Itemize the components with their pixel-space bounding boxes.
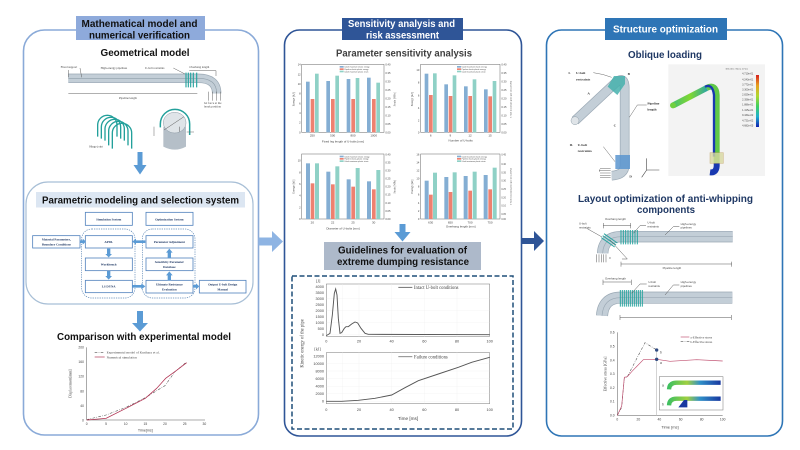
- diagram: oblique pipeline with restraints: f: [599, 169, 601, 173]
- bar chart: number of U-bolts: 0.30: [501, 80, 507, 84]
- diagram: oblique pipeline with restraints: restraints: [576, 77, 591, 81]
- line chart: effective stress vs time: [603, 330, 726, 430]
- arrow: down to comparison: [132, 311, 148, 332]
- flowchart: Material Parameters,: [42, 238, 71, 242]
- arrow: down to parametric system: [134, 152, 146, 174]
- diagram: layout B with horizontal restraints: U-bolt: [648, 280, 656, 284]
- bar chart: overhang length: 0.45: [501, 154, 507, 156]
- line chart: effective stress vs time: 0.6: [610, 330, 615, 334]
- bar chart: number of U-bolts: 0.00: [501, 130, 507, 134]
- line chart: effective stress vs time: 20: [636, 418, 640, 422]
- bar chart: overhang length: 0.35: [501, 172, 507, 174]
- line chart: effective stress vs time: a-Effective stress: [690, 335, 713, 339]
- diagram: layout B with horizontal restraints: [602, 276, 732, 320]
- diagram: layout B with horizontal restraints: pipelines: [681, 284, 692, 288]
- line chart: intact U-bolt conditions: 0: [325, 339, 327, 343]
- bar chart: diameter of U-bolts: 0.20: [385, 185, 391, 189]
- panel title: Structure optimization: [613, 24, 718, 36]
- line chart: effective stress vs time: 0.0: [610, 414, 615, 418]
- bar chart: diameter of U-bolts: 22: [331, 220, 335, 224]
- diagram: geometrical model: U-bolt restraints: [145, 66, 165, 70]
- line chart: intact U-bolt conditions: 20: [357, 339, 361, 343]
- bar chart: fixed leg length: U-bolt maximum plastic strain: [344, 70, 368, 73]
- bar chart: fixed leg length: 8: [299, 92, 301, 96]
- line chart: intact U-bolt conditions: 2500: [315, 303, 324, 307]
- line chart: effective stress vs time: a: [660, 361, 662, 365]
- line chart: displacement vs time: Displacement[mm]: [68, 370, 72, 398]
- line chart: failure conditions: 4000: [315, 385, 324, 389]
- bar chart: fixed leg length: 800: [351, 134, 356, 138]
- diagram: layout A with inclined restraints: Overhang length: [605, 217, 626, 221]
- diagram: effective stress contour: 1.886e-01: [742, 104, 754, 107]
- panel: sensitivity analysis and risk assessment: [284, 18, 522, 436]
- line chart: effective stress vs time: 0.4: [610, 358, 615, 362]
- line chart: displacement vs time: Time[ms]: [138, 429, 153, 433]
- bar chart: number of U-bolts: 6: [418, 93, 420, 97]
- bar chart: number of U-bolts: 2: [418, 119, 420, 123]
- bar chart: number of U-bolts: U-bolt maximum plastic strain: [462, 70, 486, 73]
- line chart: failure conditions: Kinetic energy of the pipe: [301, 319, 306, 368]
- bar chart: overhang length: 0.30: [501, 181, 507, 183]
- line chart: effective stress vs time: Time [ms]: [661, 425, 679, 430]
- bar chart: fixed leg length: 1000: [370, 134, 377, 138]
- line chart: failure conditions: 0: [325, 408, 327, 412]
- line chart: failure conditions: 8000: [315, 369, 324, 373]
- line chart: effective stress vs time: 0.2: [610, 386, 615, 390]
- diagram: oblique pipeline with restraints: Pipeline: [647, 101, 660, 105]
- inset: contour comparison a and b: [659, 377, 723, 410]
- bar chart: overhang length: 4: [418, 201, 420, 205]
- bar chart: fixed leg length: 0.30: [385, 80, 391, 84]
- line chart: intact U-bolt conditions: Intact U-bolt conditions: [414, 286, 459, 291]
- bar chart: diameter of U-bolts: 4: [299, 194, 301, 198]
- bar chart: overhang length: 630: [428, 220, 433, 224]
- diagram: effective stress contour: 3.772e-01: [742, 83, 754, 86]
- line chart: displacement vs time: Numerical simulation: [107, 355, 137, 359]
- diagram: oblique pipeline with restraints: length: [647, 107, 657, 111]
- diagram: effective stress contour: 4.682e-05: [742, 125, 754, 128]
- bar chart: fixed leg length: 4: [299, 111, 301, 115]
- flowchart: Parameter Adjustment: [154, 240, 186, 244]
- bar chart: fixed leg length: 0.40: [385, 63, 391, 67]
- heading: layout optimization of anti-whipping components: Layout optimization of anti-whipping: [578, 193, 753, 205]
- bar chart: overhang length: 2: [418, 209, 420, 213]
- bar chart: diameter of U-bolts: Diameter of U-bolts [mm]: [326, 226, 360, 230]
- bar chart: diameter of U-bolts: [291, 152, 396, 230]
- bar chart: number of U-bolts: 10: [416, 68, 420, 72]
- bar chart: overhang length: 0: [418, 217, 420, 221]
- bar chart: overhang length: Energy [kJ]: [410, 180, 414, 194]
- bar chart: fixed leg length: 0.10: [385, 114, 391, 118]
- line chart: effective stress vs time: 0.1: [610, 400, 615, 404]
- line chart: effective stress vs time: 40: [657, 418, 661, 422]
- line chart: effective stress vs time: Effective stress [GPa]: [603, 356, 608, 391]
- bar chart: overhang length: 0.05: [501, 214, 507, 216]
- line chart: intact U-bolt conditions: 4000: [315, 285, 324, 289]
- line chart: intact U-bolt conditions: 80: [455, 339, 459, 343]
- callout: guidelines: extreme dumping resistance: [337, 257, 469, 268]
- diagram: effective stress contour: Effective Stress (v-m): [726, 67, 748, 70]
- bar chart: number of U-bolts: 0.25: [501, 88, 507, 92]
- bar chart: number of U-bolts: 9: [449, 134, 451, 138]
- line chart: effective stress vs time: b-Effective stress: [690, 340, 713, 344]
- bar chart: number of U-bolts: Number of U-bolts: [449, 139, 473, 143]
- bar chart: fixed leg length: 0.25: [385, 88, 391, 92]
- bar chart: fixed leg length: 2: [299, 121, 301, 125]
- line chart: effective stress vs time: 0: [616, 418, 618, 422]
- bar chart: diameter of U-bolts: 0.15: [385, 193, 391, 197]
- bar chart: diameter of U-bolts: Strain [MPa]: [393, 180, 396, 194]
- flowchart: [33, 212, 246, 298]
- bar chart: number of U-bolts: [410, 63, 512, 143]
- panel title: [76, 16, 205, 42]
- line chart: displacement vs time: 30: [202, 422, 206, 426]
- line chart: intact U-bolt conditions: [J]: [316, 278, 321, 283]
- diagram: effective stress contour: 4.243e-01: [742, 78, 754, 81]
- panel: kinetic energy charts: [292, 276, 513, 429]
- diagram: layout A with inclined restraints: restraints: [647, 224, 660, 228]
- panel title: risk assessment: [366, 30, 440, 42]
- line chart: failure conditions: 40: [390, 408, 394, 412]
- line chart: intact U-bolt conditions: [315, 278, 493, 343]
- flowchart: Evaluation: [162, 287, 177, 291]
- bar chart: overhang length: 8: [418, 185, 420, 189]
- diagram: layout B with horizontal restraints: Overhang length: [605, 276, 626, 280]
- line chart: intact U-bolt conditions: 40: [390, 339, 394, 343]
- bar chart: overhang length: 6: [418, 193, 420, 197]
- inset: contour comparison a and b: a: [662, 384, 664, 388]
- flowchart: Simulation System: [96, 217, 122, 221]
- line chart: failure conditions: 6000: [315, 377, 324, 381]
- diagram: effective stress contour: 2.358e-01: [742, 99, 754, 102]
- bar chart: diameter of U-bolts: 0.10: [385, 201, 391, 205]
- diagram: layout A with inclined restraints: Pipeline length: [663, 266, 682, 270]
- bar chart: number of U-bolts: 0.10: [501, 114, 507, 118]
- line chart: displacement vs time: 10: [124, 422, 128, 426]
- line chart: intact U-bolt conditions: 1000: [315, 321, 324, 325]
- diagram: oblique pipeline with restraints: I.: [568, 71, 571, 75]
- panel title: Sensitivity analysis and: [348, 19, 455, 30]
- bar chart: fixed leg length: 6: [299, 101, 301, 105]
- heading: geometrical model: Geometrical model: [100, 47, 190, 59]
- line chart: displacement vs time: 15: [143, 422, 147, 426]
- line chart: intact U-bolt conditions: 1500: [315, 315, 324, 319]
- line chart: displacement vs time: 0: [82, 418, 84, 422]
- diagram: oblique pipeline with restraints: C: [614, 123, 617, 127]
- diagram: geometrical model: Jet force at the: [204, 101, 222, 105]
- bar chart: overhang length: 10: [416, 177, 420, 181]
- line chart: effective stress vs time: 60: [679, 418, 683, 422]
- diagram: effective stress contour: 1.415e-01: [742, 109, 754, 112]
- bar chart: overhang length: U-bolt maximum plastic strain: [462, 160, 486, 163]
- diagram: layout A with inclined restraints: High-energy: [681, 222, 697, 226]
- line chart: failure conditions: 2000: [315, 392, 324, 396]
- bar chart: fixed leg length: Pipeline elastic-plastic energy: [344, 68, 369, 71]
- inset: contour comparison a and b: b: [662, 402, 664, 406]
- diagram: oblique pipeline with restraints: [568, 71, 660, 178]
- line chart: failure conditions: 100: [486, 408, 493, 412]
- heading: layout optimization of anti-whipping components: components: [637, 204, 695, 216]
- bar chart: number of U-bolts: 12: [468, 134, 472, 138]
- diagram: layout A with inclined restraints: U-bolt: [647, 220, 655, 224]
- arrow: left panel to middle panel: [258, 231, 283, 252]
- flowchart: Workbench: [101, 262, 117, 266]
- diagram: layout B with horizontal restraints: restraints: [648, 284, 661, 288]
- diagram: geometrical model: [61, 65, 222, 150]
- line chart: effective stress vs time: b: [660, 350, 662, 354]
- bar chart: diameter of U-bolts: 0.25: [385, 177, 391, 181]
- diagram: oblique pipeline with restraints: B: [628, 72, 631, 76]
- bar chart: diameter of U-bolts: 6: [299, 182, 301, 186]
- line chart: failure conditions: Time [ms]: [398, 416, 418, 421]
- line chart: failure conditions: [301, 319, 493, 421]
- bar chart: number of U-bolts: 0: [418, 130, 420, 134]
- bar chart: diameter of U-bolts: 20: [311, 220, 314, 224]
- line chart: intact U-bolt conditions: 60: [422, 339, 426, 343]
- bar chart: number of U-bolts: Pipeline elastic-plastic energy: [462, 68, 486, 71]
- line chart: intact U-bolt conditions: 2000: [315, 309, 324, 313]
- bar chart: number of U-bolts: 0.20: [501, 97, 507, 101]
- line chart: displacement vs time: 200: [78, 345, 84, 349]
- bar chart: fixed leg length: Strain [MPa]: [393, 92, 396, 106]
- bar chart: diameter of U-bolts: U-bolt maximum plastic strain: [344, 160, 368, 163]
- bar chart: number of U-bolts: U-bolt maximum elastic energy: [462, 66, 487, 69]
- flowchart: LS DYNA: [102, 285, 116, 289]
- line chart: displacement vs time: [68, 345, 206, 433]
- diagram: geometrical model: High-energy pipelines: [101, 66, 128, 70]
- bar chart: overhang length: 750: [488, 220, 493, 224]
- line chart: failure conditions: 0: [322, 400, 324, 404]
- bar chart: overhang length: 0.10: [501, 206, 507, 208]
- callout: guidelines: [324, 242, 481, 270]
- bar chart: number of U-bolts: 15: [488, 134, 492, 138]
- line chart: intact U-bolt conditions: 0: [322, 333, 324, 337]
- flowchart: Sensitivity Parameter: [155, 260, 185, 264]
- panel: mathematical model and numerical verification: [24, 16, 258, 435]
- bar chart: fixed leg length: 12: [298, 72, 301, 76]
- line chart: effective stress vs time: 80: [700, 418, 704, 422]
- panel: parametric modeling and selection system: [26, 182, 253, 304]
- bar chart: diameter of U-bolts: Energy [kJ]: [291, 180, 295, 194]
- diagram: layout A with inclined restraints: restraints: [579, 225, 591, 229]
- line chart: effective stress vs time: 100: [720, 418, 726, 422]
- bar chart: fixed leg length: 10: [298, 82, 301, 86]
- line chart: intact U-bolt conditions: 3000: [315, 297, 324, 301]
- flowchart: Manual: [217, 287, 228, 291]
- line chart: displacement vs time: 40: [80, 404, 84, 408]
- bar chart: diameter of U-bolts: 8: [299, 170, 301, 174]
- line chart: displacement vs time: 25: [183, 422, 187, 426]
- diagram: layout A with inclined restraints: U-bolt: [579, 222, 587, 226]
- bar chart: diameter of U-bolts: 2: [299, 205, 301, 209]
- line chart: effective stress vs time: 0.5: [610, 344, 615, 348]
- line chart: failure conditions: 20: [357, 408, 361, 412]
- line chart: failure conditions: 80: [455, 408, 459, 412]
- bar chart: diameter of U-bolts: 0.00: [385, 217, 391, 221]
- bar chart: overhang length: 14: [416, 160, 420, 164]
- bar chart: number of U-bolts: 0.15: [501, 105, 507, 109]
- bar chart: diameter of U-bolts: 0.05: [385, 209, 391, 213]
- line chart: displacement vs time: Experimental model of Kurihara et al.: [107, 351, 160, 355]
- panel: structure optimization: [546, 18, 782, 436]
- bar chart: diameter of U-bolts: 25: [351, 220, 355, 224]
- diagram: layout A with inclined restraints: F: [609, 256, 611, 260]
- bar chart: number of U-bolts: 0.35: [501, 71, 507, 75]
- bar chart: overhang length: 650: [448, 220, 453, 224]
- bar chart: fixed leg length: 14: [298, 63, 301, 67]
- diagram: effective stress contour: 2.829e-01: [742, 94, 754, 97]
- diagram: geometrical model: Hinge joint: [89, 144, 103, 148]
- line chart: failure conditions: Failure conditions: [414, 356, 448, 361]
- heading: layout optimization of anti-whipping components: [578, 193, 753, 216]
- diagram: layout A with inclined restraints: [579, 217, 733, 270]
- bar chart: number of U-bolts: 6: [430, 134, 432, 138]
- bar chart: overhang length: 700: [468, 220, 473, 224]
- panel title: Mathematical model and: [82, 19, 198, 30]
- bar chart: diameter of U-bolts: U-bolt maximum elastic energy: [344, 155, 370, 158]
- heading: comparison with experimental model: Comparison with experimental model: [57, 332, 231, 343]
- bar chart: fixed leg length: [291, 63, 396, 144]
- bar chart: number of U-bolts: Energy [kJ]: [410, 92, 414, 106]
- bar chart: fixed leg length: Energy [kJ]: [291, 92, 295, 106]
- line chart: intact U-bolt conditions: 500: [318, 327, 324, 331]
- bar chart: overhang length: 12: [416, 168, 420, 172]
- panel title: [342, 18, 463, 42]
- bar chart: overhang length: 0.40: [501, 164, 507, 166]
- flowchart: Optimization System: [155, 217, 184, 221]
- bar chart: diameter of U-bolts: 30: [372, 220, 376, 224]
- bar chart: fixed leg length: 0.05: [385, 122, 391, 126]
- line chart: failure conditions: [kJ]: [314, 346, 321, 351]
- line chart: failure conditions: 10000: [313, 362, 324, 366]
- diagram: layout A with inclined restraints: pipelines: [681, 226, 692, 230]
- line chart: displacement vs time: 0: [86, 422, 88, 426]
- line chart: displacement vs time: 160: [78, 360, 84, 364]
- diagram: geometrical model: Fixed support: [61, 65, 77, 69]
- diagram: oblique pipeline with restraints: U-bolt: [578, 143, 588, 147]
- arrow: down to guidelines: [394, 224, 410, 242]
- diagram: effective stress contour: 4.721e-02: [742, 119, 754, 122]
- callout: guidelines: Guidelines for evaluation of: [338, 246, 468, 256]
- bar chart: diameter of U-bolts: 10: [298, 159, 301, 163]
- diagram: geometrical model: break position: [204, 104, 221, 108]
- line chart: displacement vs time: 20: [163, 422, 167, 426]
- bar chart: fixed leg length: 0.15: [385, 105, 391, 109]
- diagram: oblique pipeline with restraints: A: [587, 92, 590, 96]
- heading: oblique loading: Oblique loading: [628, 49, 702, 61]
- line chart: intact U-bolt conditions: 3500: [315, 291, 324, 295]
- bar chart: overhang length: 0.00: [501, 219, 507, 221]
- bar chart: fixed leg length: 500: [330, 134, 335, 138]
- flowchart: Output U-bolt Design: [208, 282, 237, 286]
- bar chart: fixed leg length: 250: [310, 134, 315, 138]
- line chart: failure conditions: 12000: [313, 354, 324, 358]
- bar chart: fixed leg length: 0.35: [385, 71, 391, 75]
- bar chart: overhang length: 0.20: [501, 197, 507, 199]
- line chart: displacement vs time: 120: [78, 375, 84, 379]
- diagram: effective stress contour: 9.434e-02: [742, 114, 754, 117]
- bar chart: overhang length: U-bolt maximum elastic energy: [462, 155, 487, 158]
- bar chart: overhang length: Pipeline elastic-plastic energy: [462, 158, 486, 161]
- bar chart: diameter of U-bolts: 0.35: [385, 160, 391, 164]
- bar chart: diameter of U-bolts: 0: [299, 217, 301, 221]
- bar chart: number of U-bolts: 8: [418, 81, 420, 85]
- flowchart: APDL: [104, 240, 113, 244]
- panel title: [605, 18, 727, 40]
- line chart: displacement vs time: 80: [80, 389, 84, 393]
- diagram: effective stress contour: [668, 64, 765, 176]
- arrow: middle panel to right panel: [522, 231, 544, 251]
- diagram: layout B with horizontal restraints: High-energy: [681, 280, 697, 284]
- bar chart: diameter of U-bolts: 0.30: [385, 168, 391, 172]
- bar chart: fixed leg length: 0: [299, 130, 301, 134]
- bar chart: number of U-bolts: 0.40: [501, 63, 507, 67]
- line chart: intact U-bolt conditions: 100: [486, 339, 493, 343]
- bar chart: overhang length: [410, 152, 512, 229]
- diagram: effective stress contour: 4.710e-01: [742, 73, 754, 76]
- flowchart: Database: [163, 265, 176, 269]
- diagram: oblique pipeline with restraints: D: [629, 174, 632, 178]
- line chart: displacement vs time: 5: [105, 422, 107, 426]
- bar chart: fixed leg length: 0.00: [385, 130, 391, 134]
- heading bar: parametric modeling: Parametric modeling and selection system: [42, 194, 239, 206]
- bar chart: diameter of U-bolts: Pipeline elastic-plastic energy: [344, 158, 369, 161]
- flowchart: Boundary Conditions: [42, 243, 72, 247]
- line chart: effective stress vs time: 0.3: [610, 372, 615, 376]
- bar chart: overhang length: U-bolt maximum principal stress [GPa]: [509, 168, 512, 205]
- bar chart: fixed leg length: 0.20: [385, 97, 391, 101]
- diagram: oblique pipeline with restraints: U-bolt: [576, 71, 586, 75]
- bar chart: number of U-bolts: U-bolt maximum principal stress [GPa]: [509, 81, 512, 118]
- bar chart: number of U-bolts: 0.05: [501, 122, 507, 126]
- bar chart: diameter of U-bolts: 0.40: [385, 152, 391, 156]
- bar chart: overhang length: Overhang length [mm]: [446, 225, 476, 229]
- diagram: geometrical model: Pipeline length: [119, 96, 137, 100]
- bar chart: overhang length: 16: [416, 152, 420, 156]
- diagram: oblique pipeline with restraints: II.: [570, 143, 573, 147]
- flowchart: Ultimate Resistance: [156, 282, 183, 286]
- diagram: effective stress contour: 3.300e-01: [742, 88, 754, 91]
- bar chart: overhang length: 0.25: [501, 189, 507, 191]
- line chart: failure conditions: 60: [422, 408, 426, 412]
- bar chart: fixed leg length: Fixed leg length of U-bolts [mm]: [322, 140, 364, 144]
- diagram: oblique pipeline with restraints: restraints: [578, 149, 593, 153]
- panel title: numerical verification: [89, 30, 190, 42]
- diagram: geometrical model: Overhang length: [189, 65, 210, 69]
- heading: parameter sensitivity analysis: Parameter sensitivity analysis: [336, 48, 472, 60]
- bar chart: number of U-bolts: 4: [418, 106, 420, 110]
- bar chart: fixed leg length: U-bolt maximum elastic energy: [344, 66, 370, 69]
